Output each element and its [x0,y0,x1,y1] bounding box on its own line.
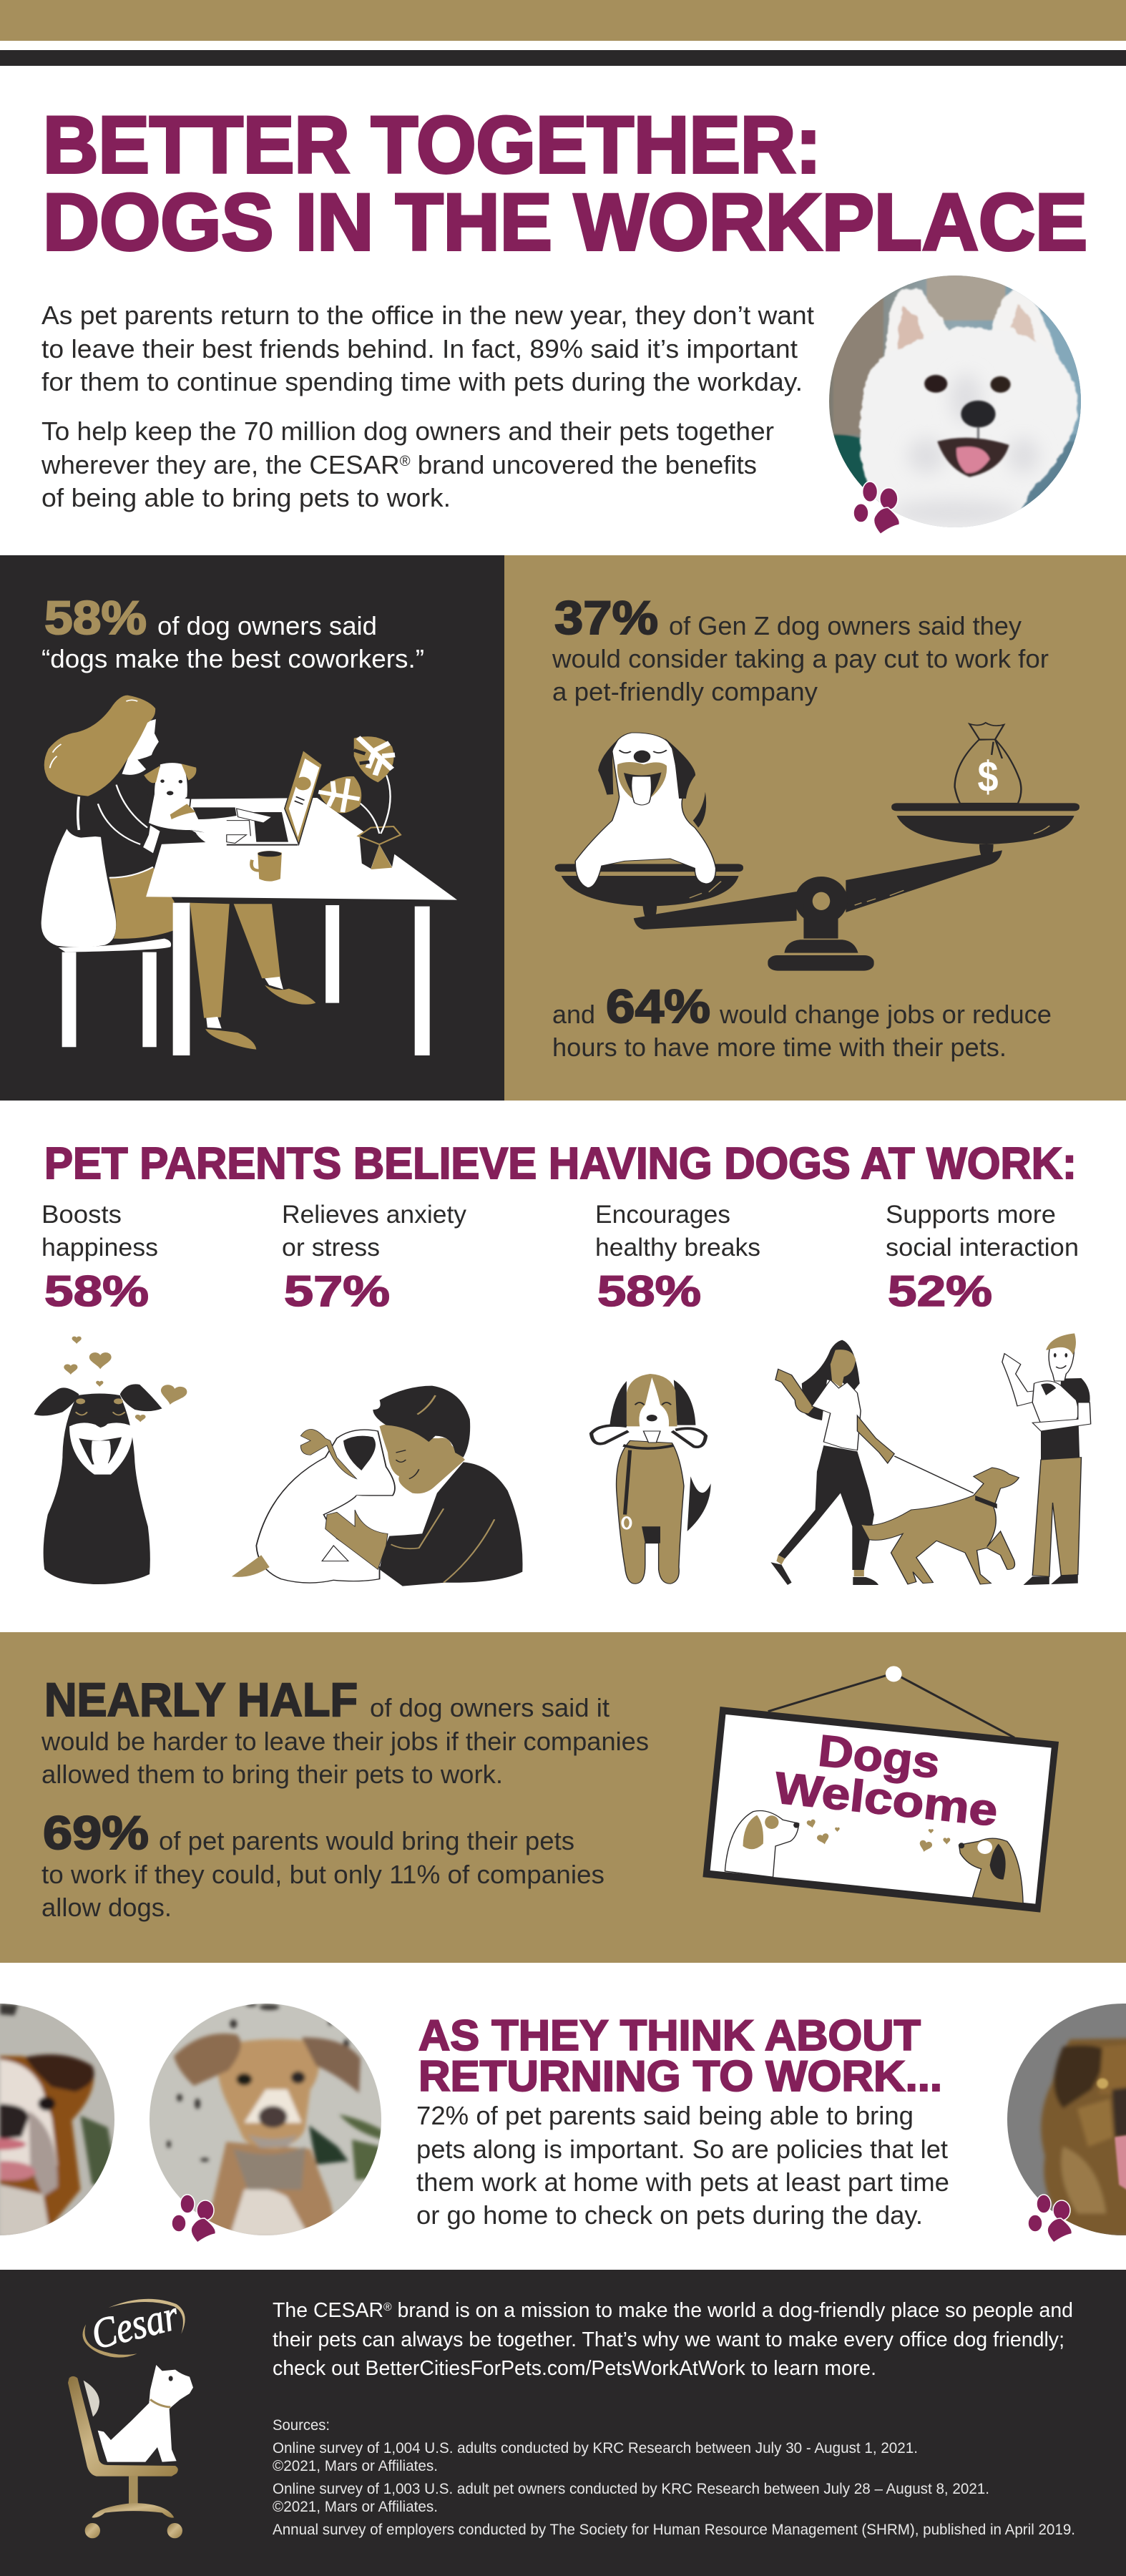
dollar sign: $ [977,753,999,801]
body text: or go home to check on pets during the day. [416,2200,923,2230]
laptop [227,750,322,845]
panel: Gen Z pay cut [504,555,1126,1101]
sign dog right [959,1838,1023,1903]
stat: nearly half: would be harder to leave their jobs if their companies [41,1727,649,1756]
benefit: happiness: happiness [41,1234,158,1262]
stat: nearly half: NEARLY HALF [44,1673,358,1726]
beam [634,844,1002,971]
logo: Cesar: Cesar [87,2291,183,2358]
body text: pets along is important. So are policies that let [416,2135,948,2164]
stat: 69 percent: to work if they could, but only 11% of companies [41,1860,604,1889]
small dog [149,794,224,848]
benefit: breaks: healthy breaks [595,1234,760,1262]
benefit: breaks [595,1201,760,1315]
sign: dogs welcome [702,1666,1059,1913]
panel: benefits of dogs at work [34,1139,1091,1586]
illustration: woman at desk with dog [41,696,457,1055]
benefit: social interaction: social interaction [886,1234,1079,1262]
stat: 64 percent: 64% [606,980,710,1033]
intro paragraph 2: ® [400,454,411,469]
icon: paw print [853,482,900,535]
mission text: brand is on a mission to make the world a dog-friendly place so people and [392,2299,1073,2322]
intro paragraph 1: to leave their best friends behind. In fact, 89% said it’s important [41,334,798,364]
woman hips and legs [109,867,315,1050]
stat: 37 percent [552,591,1049,706]
panel: dog owners coworkers [0,555,504,1101]
panel: introduction [41,100,1088,535]
money bag [955,739,1021,804]
benefit: anxiety: Relieves anxiety [282,1201,467,1229]
stat: 64 percent: would change jobs or reduce [719,1000,1052,1029]
sources: Annual survey of employers conducted by The Society for Human Resource Management (SHRM), published in April 2019. [273,2521,1075,2538]
stat: 37 percent: 37% [554,591,658,644]
benefit: breaks: 58% [597,1267,701,1315]
chair [41,796,171,1047]
heading: AS THEY THINK ABOUT [418,2011,921,2059]
table [146,798,457,900]
man hand [325,1510,388,1569]
benefit: anxiety [282,1201,467,1315]
icon: paw print [172,2195,215,2243]
body text: 72% of pet parents said being able to bring [416,2101,914,2130]
icon: paw print [1028,2195,1072,2243]
photo: puppy [147,2000,386,2240]
hair [44,696,155,796]
mission text: check out BetterCitiesForPets.com/PetsWorkAtWork to learn more. [273,2357,876,2380]
mission text: their pets can always be together. That’s why we want to make every office dog friendly; [273,2328,1064,2351]
heading [418,2011,942,2100]
coffee mug [251,851,282,882]
stat: 64 percent: and [552,1000,595,1029]
dog ears [598,738,695,799]
hearts [64,1337,188,1422]
stat: 37 percent: a pet-friendly company [552,677,818,706]
stat: nearly half: allowed them to bring their pets to work. [41,1760,503,1789]
intro paragraph 2: wherever they are, the CESAR [41,450,393,479]
stat: 58 percent: 58% [44,591,147,644]
stat: nearly half [41,1673,649,1789]
dog tail [693,792,706,828]
stat: 37 percent: of Gen Z dog owners said they [669,611,1022,640]
benefit: anxiety: or stress [282,1234,380,1262]
illustration: scale weighing dog and money [555,723,1080,971]
title [43,100,1087,267]
sources: ©2021, Mars or Affiliates. [273,2498,438,2515]
photo: white terrier [826,272,1088,533]
right pan [891,803,1080,844]
sources [273,2416,1075,2538]
photo: shepherd [1002,2000,1126,2240]
benefit: happiness: Boosts [41,1201,122,1229]
mission text [273,2299,1073,2380]
benefit: social interaction: 52% [888,1267,992,1315]
sources: Online survey of 1,003 U.S. adult pet owners conducted by KRC Research between July 28 – August 8, 2021. [273,2480,989,2497]
stat: 58 percent [41,591,424,673]
arms [192,807,237,819]
face [122,719,159,775]
intro paragraph 1: As pet parents return to the office in the new year, they don’t want [41,301,814,330]
body text [416,2101,949,2230]
panel: returning to work [0,2000,1126,2243]
intro paragraph 2 [41,416,774,512]
benefit: social interaction [886,1201,1079,1315]
stat: 58 percent: of dog owners said [157,611,377,640]
sources: Online survey of 1,004 U.S. adults conducted by KRC Research between July 30 - August 1, 2021. [273,2439,918,2457]
sources: ©2021, Mars or Affiliates. [273,2457,438,2474]
mission text: The CESAR [273,2299,386,2322]
panel: footer [0,2270,1126,2576]
sign text [773,1726,1000,1836]
dog body [575,733,716,888]
illustration: dog on office chair [68,2365,193,2538]
benefit: anxiety: 57% [284,1267,390,1315]
heading: RETURNING TO WORK... [418,2052,942,2100]
body text: them work at home with pets at least part time [416,2167,949,2197]
panel: nearly half [0,1632,1126,1963]
sign text: Dogs [816,1726,942,1788]
dog muzzle [617,762,667,799]
stat: 64 percent [552,980,1052,1062]
stat: 37 percent: would consider taking a pay cut to work for [552,644,1049,673]
sign dog left [725,1810,799,1877]
mission text: ® [383,2301,392,2313]
woman torso [79,775,159,878]
intro paragraph 2: To help keep the 70 million dog owners and their pets together [41,416,774,446]
benefit: happiness [41,1201,158,1315]
sources: Sources: [273,2416,330,2434]
benefit: happiness: 58% [44,1267,149,1315]
illustration: man hugging dog [232,1386,522,1586]
sign hearts [806,1819,950,1853]
header bars [0,0,1126,66]
stat: 64 percent: hours to have more time with their pets. [552,1033,1007,1062]
sign text: Welcome [773,1763,1000,1836]
heading: PET PARENTS BELIEVE HAVING DOGS AT WORK: [44,1139,1077,1189]
illustration: woman walking dog [770,1340,1019,1585]
title: DOGS IN THE WORKPLACE [43,177,1087,267]
stat: 58 percent: “dogs make the best coworkers.” [41,644,424,673]
man shirt [380,1462,522,1586]
photo: bulldog [0,2000,122,2240]
stat: 69 percent [41,1806,604,1922]
intro paragraph 2: of being able to bring pets to work. [41,483,451,512]
intro paragraph 2: brand uncovered the benefits [411,450,757,479]
illustration: happy black dog with hearts [34,1337,188,1584]
stat: nearly half: of dog owners said it [370,1693,609,1722]
intro paragraph 1: for them to continue spending time with pets during the workday. [41,367,803,396]
stat: 69 percent: 69% [43,1806,149,1859]
left pan [555,864,743,921]
illustration: dog with leash in mouth [591,1374,711,1584]
intro paragraph 1 [41,301,814,396]
man head [380,1425,465,1493]
benefit: breaks: Encourages [595,1201,730,1229]
benefit: social interaction: Supports more [886,1201,1056,1229]
stat: 69 percent: of pet parents would bring their pets [159,1826,574,1855]
illustration: man holding puppy [1002,1333,1091,1585]
potted plant [318,736,401,869]
title: BETTER TOGETHER: [43,100,821,190]
stat: 69 percent: allow dogs. [41,1893,172,1922]
